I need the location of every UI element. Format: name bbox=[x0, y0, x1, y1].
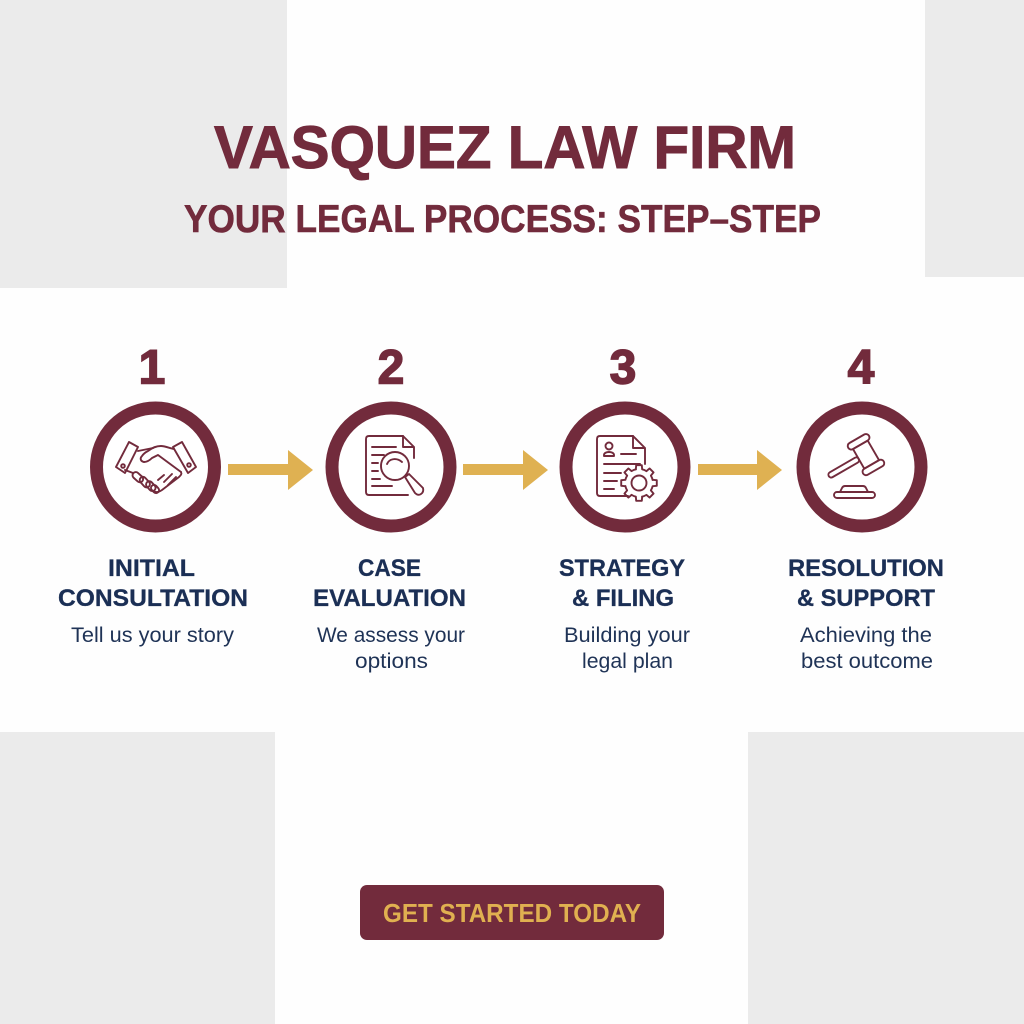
number 1: 1 bbox=[139, 342, 165, 394]
description 3: Building your bbox=[564, 624, 690, 647]
step 1: initial consultation bbox=[58, 342, 248, 647]
step 4: resolution and support bbox=[788, 342, 944, 673]
call to action button bbox=[360, 885, 664, 940]
ring 3 bbox=[566, 408, 684, 526]
description 4: Achieving the bbox=[800, 624, 932, 647]
description 3: legal plan bbox=[582, 650, 673, 673]
description 4: best outcome bbox=[801, 650, 933, 673]
heading 1: INITIAL bbox=[108, 555, 195, 582]
heading 2: CASE bbox=[358, 555, 421, 582]
icon: document with magnifier bbox=[366, 436, 423, 495]
heading 1: CONSULTATION bbox=[58, 585, 248, 612]
description 1: Tell us your story bbox=[71, 624, 235, 647]
number 2: 2 bbox=[378, 342, 404, 394]
step 3: strategy and filing bbox=[559, 342, 690, 673]
step 2: case evaluation bbox=[313, 342, 466, 673]
heading 3: STRATEGY bbox=[559, 555, 685, 582]
heading 4: & SUPPORT bbox=[797, 585, 935, 612]
arrow 2 to 3 bbox=[463, 450, 548, 490]
ring 4 bbox=[803, 408, 921, 526]
number 3: 3 bbox=[610, 342, 636, 394]
icon: gavel bbox=[820, 433, 886, 498]
heading 4: RESOLUTION bbox=[788, 555, 944, 582]
number 4: 4 bbox=[848, 342, 875, 394]
title: VASQUEZ LAW FIRM bbox=[214, 114, 796, 181]
heading 3: & FILING bbox=[572, 585, 674, 612]
ring 1 bbox=[96, 408, 214, 526]
icon: handshake bbox=[116, 442, 196, 494]
icon: document with gear bbox=[597, 436, 657, 501]
description 2: We assess your bbox=[317, 624, 465, 647]
subtitle: YOUR LEGAL PROCESS: STEP–STEP bbox=[184, 198, 821, 241]
arrow 1 to 2 bbox=[228, 450, 313, 490]
description 2: options bbox=[355, 650, 428, 673]
arrow 3 to 4 bbox=[698, 450, 782, 490]
heading 2: EVALUATION bbox=[313, 585, 466, 612]
call to action button: GET STARTED TODAY bbox=[383, 898, 641, 928]
ring 2 bbox=[332, 408, 450, 526]
